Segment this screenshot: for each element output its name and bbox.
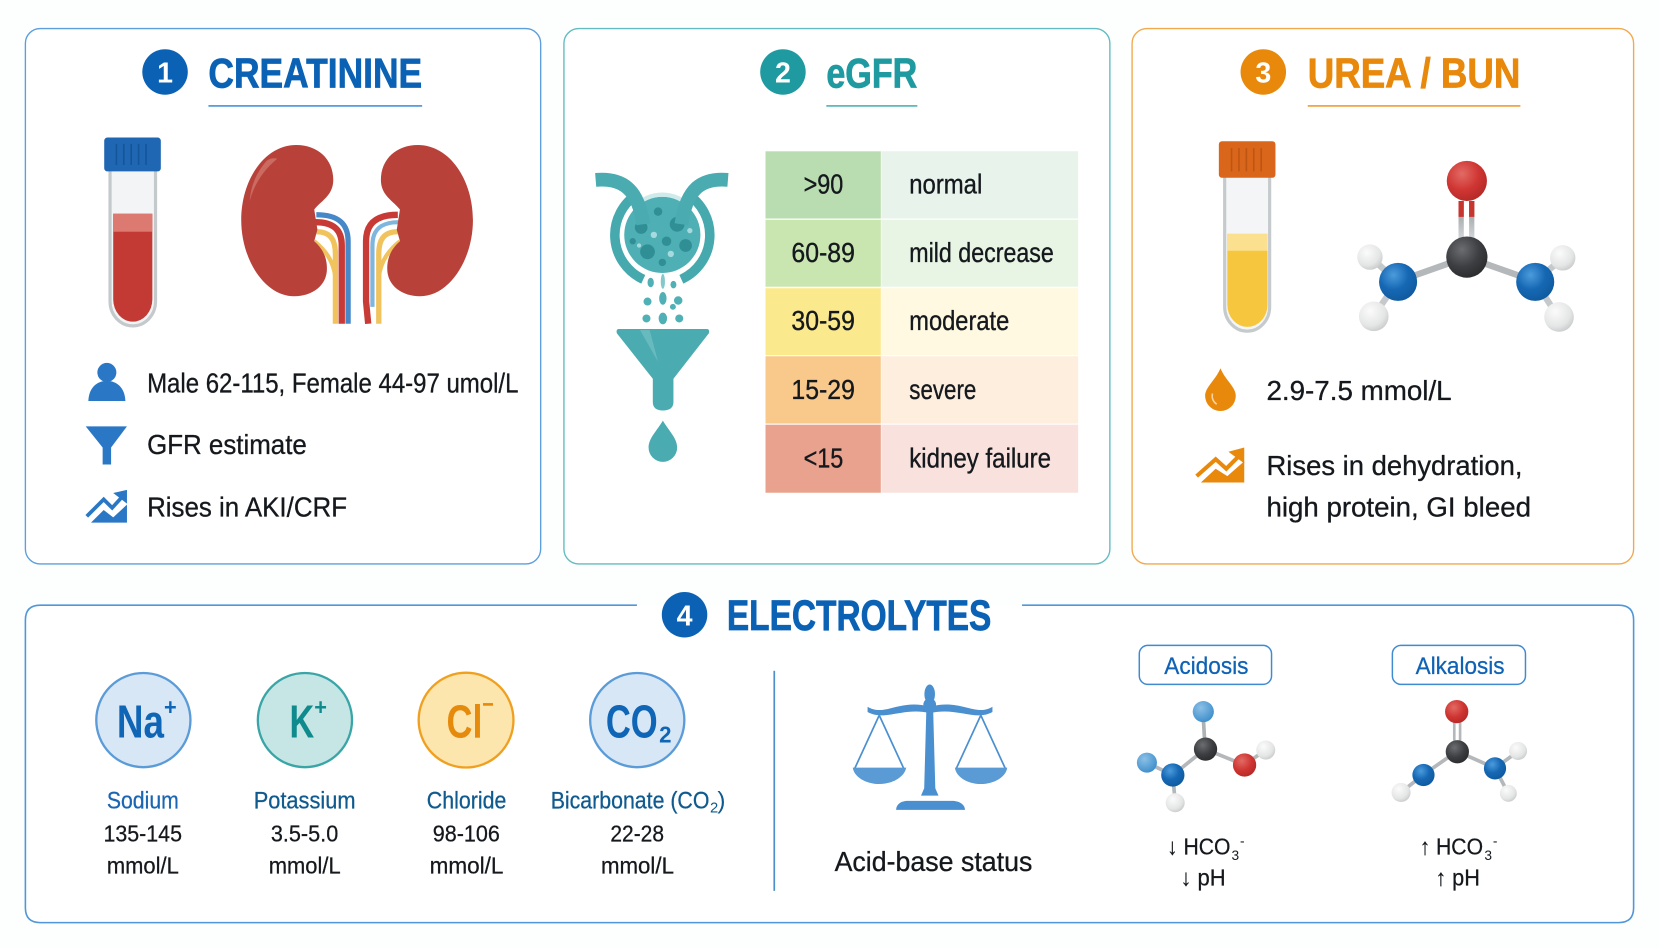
row: mild decrease: mild decrease: [909, 237, 1054, 268]
electrolyte: potassium: [254, 673, 356, 878]
icon: orange drop: [1205, 368, 1236, 411]
row: mild decrease: 60-89: [791, 237, 855, 268]
text: rises: Rises in AKI/CRF: [147, 491, 347, 522]
electrolyte: bicarbonate: ): [717, 787, 725, 814]
icon: kidneys: [241, 145, 473, 324]
text: urea causes: high protein, GI bleed: [1266, 491, 1531, 522]
row: kidney failure: kidney failure: [909, 443, 1051, 474]
text: acidosis values: -: [1240, 833, 1245, 848]
electrolyte: bicarbonate: 2: [710, 801, 718, 817]
heading: urea / bun: UREA / BUN: [1308, 50, 1520, 96]
electrolyte: bicarbonate: 2: [659, 722, 672, 748]
callout: acidosis: [1139, 645, 1272, 684]
text: gfr estimate: GFR estimate: [147, 429, 307, 460]
row: normal: normal: [909, 169, 982, 200]
text: urea range: 2.9-7.5 mmol/L: [1266, 375, 1452, 406]
heading: electrolytes: [662, 592, 991, 639]
electrolyte: potassium: +: [314, 694, 327, 720]
row: severe: severe: [909, 374, 976, 405]
row: moderate: [765, 288, 1078, 355]
row: kidney failure: <15: [804, 443, 843, 474]
text: alkalosis values: [1420, 833, 1497, 891]
icon: filtrate drop: [649, 421, 677, 462]
electrolyte: bicarbonate: 22-28: [610, 821, 664, 847]
panel: urea / bun: [1132, 29, 1634, 564]
panel: creatinine: [25, 29, 541, 564]
row: kidney failure: [765, 425, 1078, 493]
heading: electrolytes: 4: [677, 600, 693, 632]
heading: creatinine: CREATININE: [208, 50, 422, 96]
text: acidosis values: ↓ HCO: [1167, 833, 1230, 859]
heading: urea / bun: [1241, 49, 1520, 107]
heading: creatinine: [142, 49, 422, 107]
text: alkalosis values: -: [1493, 833, 1497, 848]
row: moderate: 30-59: [791, 305, 855, 336]
text: acidosis values: [1167, 833, 1245, 891]
electrolyte: potassium: mmol/L: [269, 852, 341, 878]
row: moderate: moderate: [909, 305, 1009, 336]
icon: person: [88, 363, 125, 401]
callout: alkalosis: [1392, 645, 1525, 684]
electrolyte: chloride: mmol/L: [430, 852, 503, 878]
electrolyte: sodium: 135-145: [103, 821, 182, 847]
row: normal: >90: [804, 169, 843, 200]
electrolyte: sodium: Na: [117, 695, 165, 747]
electrolyte: potassium: 3.5-5.0: [271, 821, 338, 847]
text: alkalosis values: ↑ pH: [1435, 865, 1480, 891]
icon: blood tube: [104, 138, 161, 326]
row: normal: [765, 151, 1078, 218]
callout: acidosis: Acidosis: [1164, 653, 1248, 680]
electrolyte: chloride: [419, 673, 513, 878]
text: alkalosis values: 3: [1484, 848, 1492, 863]
heading: egfr: 2: [775, 58, 791, 90]
text: alkalosis values: ↑ HCO: [1420, 833, 1483, 859]
icon: rising chart: [87, 490, 127, 523]
table: egfr stages: [765, 151, 1078, 493]
electrolyte: bicarbonate: [551, 673, 725, 878]
text: urea causes: [1266, 450, 1531, 522]
electrolyte: bicarbonate: mmol/L: [601, 852, 674, 878]
text: acid-base status: Acid-base status: [835, 846, 1032, 877]
electrolyte: potassium: Potassium: [254, 787, 356, 814]
electrolyte: sodium: [96, 673, 190, 878]
row: mild decrease: [765, 220, 1078, 287]
callout: alkalosis: Alkalosis: [1416, 653, 1505, 680]
icon: acidosis molecule: [1137, 701, 1275, 812]
panel: egfr: [564, 29, 1110, 564]
icon: urine tube: [1219, 141, 1275, 331]
electrolyte: chloride: Chloride: [427, 787, 506, 814]
text: urea causes: Rises in dehydration,: [1266, 450, 1523, 481]
icon: funnel: [86, 426, 127, 464]
electrolyte: bicarbonate: Bicarbonate (CO: [551, 787, 709, 814]
electrolyte: bicarbonate: CO: [606, 695, 658, 747]
electrolyte: chloride: 98-106: [433, 821, 500, 847]
electrolyte: sodium: Sodium: [107, 787, 179, 814]
icon: alkalosis molecule: [1392, 700, 1527, 802]
icon: rising chart orange: [1197, 448, 1244, 482]
electrolyte: sodium: mmol/L: [107, 852, 179, 878]
text: acidosis values: ↓ pH: [1180, 865, 1226, 891]
text: reference range: Male 62-115, Female 44-97 umol/L: [147, 368, 518, 399]
heading: egfr: [760, 49, 917, 107]
text: acidosis values: 3: [1232, 848, 1240, 863]
electrolyte: sodium: +: [164, 694, 177, 720]
icon: urea molecule: [1357, 161, 1575, 332]
heading: urea / bun: 3: [1255, 58, 1271, 90]
icon: collecting funnel: [617, 329, 709, 411]
panel: electrolytes: [25, 592, 1634, 923]
heading: electrolytes: ELECTROLYTES: [727, 592, 991, 639]
row: severe: 15-29: [791, 374, 855, 405]
icon: balance scale: [853, 685, 1007, 810]
electrolyte: chloride: Cl: [446, 695, 482, 747]
heading: egfr: eGFR: [826, 50, 917, 96]
row: severe: [765, 356, 1078, 424]
heading: creatinine: 1: [157, 58, 173, 90]
electrolyte: potassium: K: [289, 695, 315, 747]
icon: glomerulus filter: [596, 180, 728, 324]
